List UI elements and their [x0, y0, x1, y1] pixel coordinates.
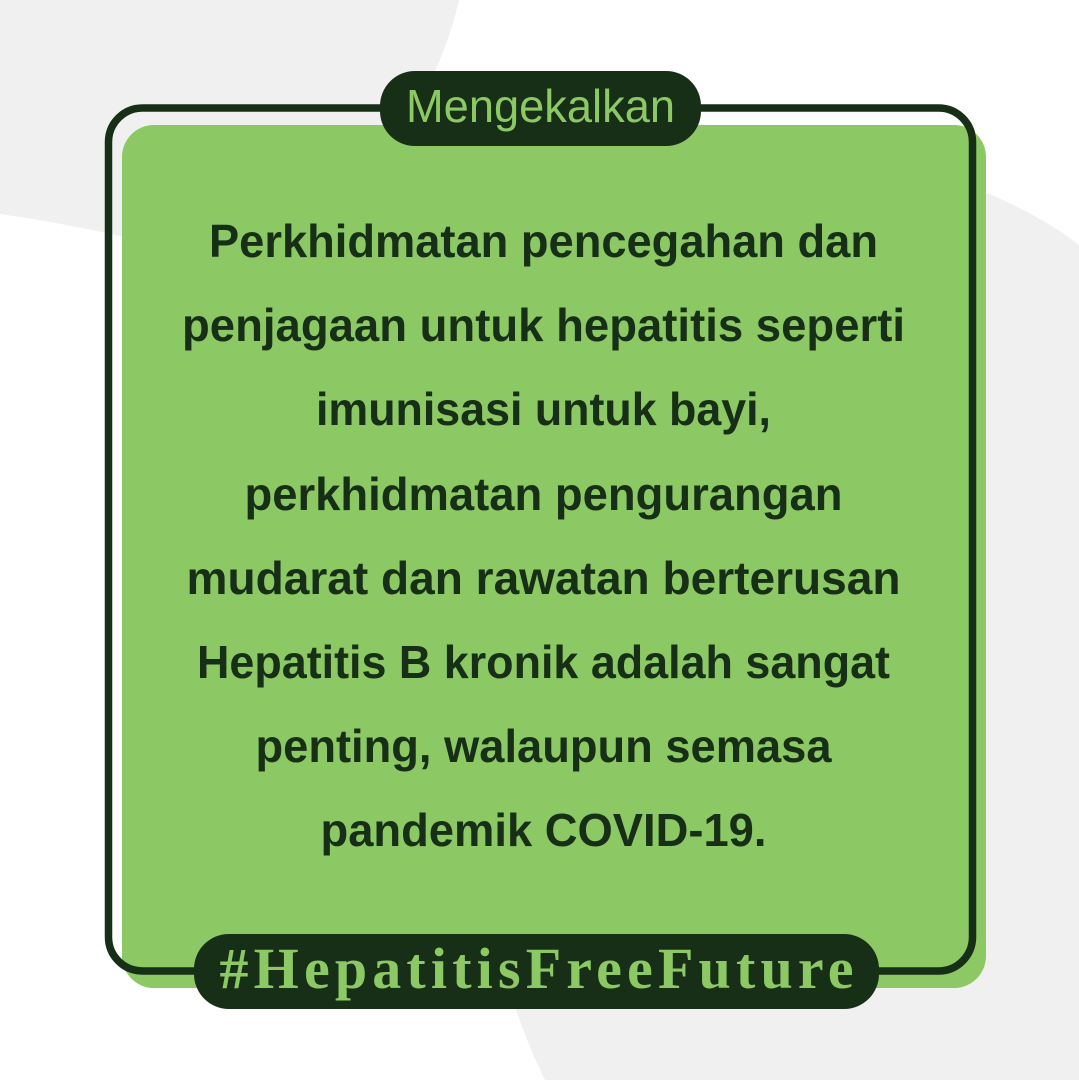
hashtag pill — [194, 934, 879, 1009]
body text: pandemik COVID-19. — [320, 804, 766, 856]
body text: penjagaan untuk hepatitis seperti — [182, 299, 905, 351]
body text — [182, 215, 905, 856]
hashtag text: #HepatitisFreeFuture — [220, 936, 854, 1001]
body text: Hepatitis B kronik adalah sangat — [197, 636, 890, 688]
body text: perkhidmatan pengurangan — [244, 468, 842, 520]
background shape: top-left grey blob — [0, 0, 459, 240]
panel: green card — [122, 125, 986, 988]
body text: imunisasi untuk bayi, — [316, 383, 771, 435]
heading text: Mengekalkan — [406, 80, 675, 132]
body text: mudarat dan rawatan berterusan — [186, 552, 900, 604]
background shape: bottom-right grey blob — [510, 192, 1079, 1080]
body text: penting, walaupun semasa — [256, 720, 832, 772]
heading pill: Mengekalkan — [380, 71, 701, 146]
panel: dark outline frame — [108, 108, 972, 971]
body text: Perkhidmatan pencegahan dan — [209, 215, 878, 267]
